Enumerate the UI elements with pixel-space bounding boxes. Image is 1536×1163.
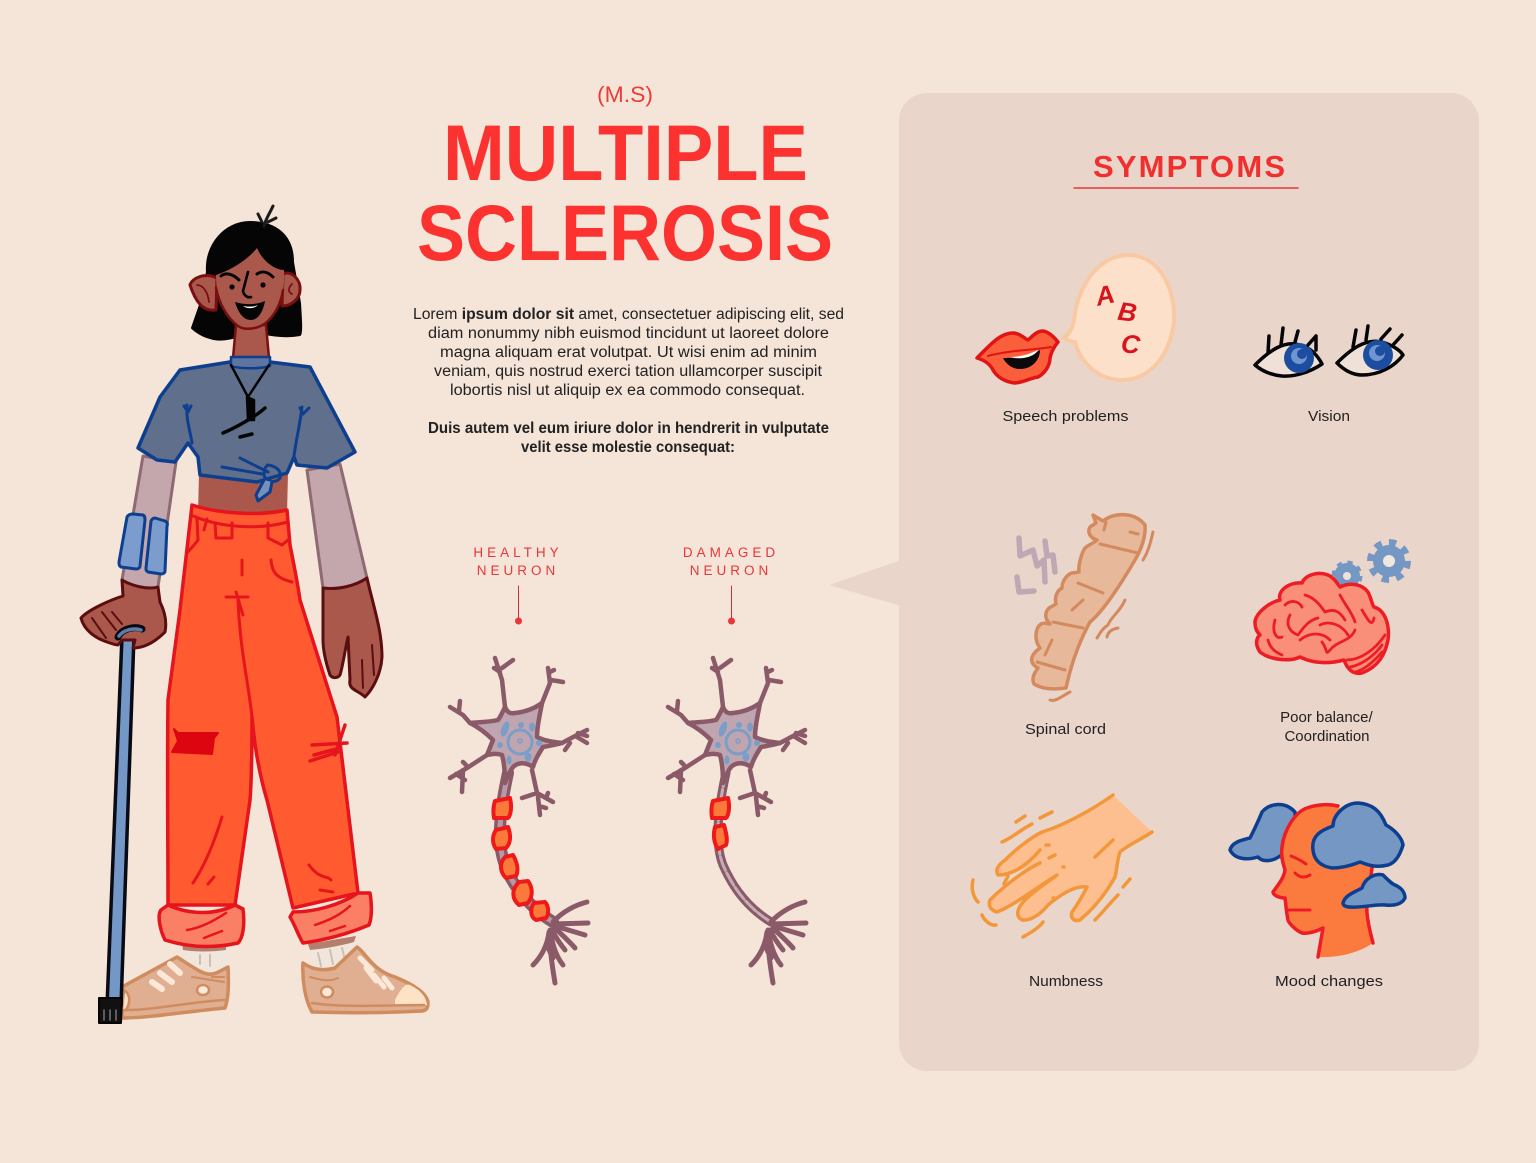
title [417,108,833,277]
cane [99,636,134,1023]
motion marks [1050,532,1153,700]
mouth [1003,350,1040,369]
icon: speech problems [977,255,1174,383]
nucleus and organelles [715,720,760,764]
title: MULTIPLE [443,108,808,197]
bold paragraph: Duis autem vel eum iriure dolor in hendrerit in vulputate [428,420,829,437]
panel pointer [829,560,901,606]
intro paragraph: Lorem ipsum dolor sit amet, consectetuer adipiscing elit, sed [413,306,844,323]
waist [198,472,288,515]
socks [177,936,358,975]
icon: mood changes head [1230,803,1405,957]
hand outline [989,795,1152,921]
label: healthy neuron: HEALTHY [473,545,563,560]
icon: spinal cord [1017,515,1153,700]
label: speech problems: Speech problems [1002,408,1128,425]
bold paragraph [428,420,829,456]
inner lip line [988,347,1051,356]
shirt knot and creases [184,405,309,501]
speech bubble [1063,255,1174,380]
ear details [197,284,292,302]
intro paragraph: lobortis nisl ut aliquip ex ea commodo consequat. [450,382,805,399]
right hand [323,578,382,697]
person with cane [81,206,428,1023]
symptoms heading: SYMPTOMS [1093,149,1285,184]
label: poor balance: Coordination [1284,728,1370,745]
label: mood changes: Mood changes [1275,973,1383,990]
icon: brain with gears [1255,543,1407,673]
axon terminal [533,902,588,983]
right shoe [303,947,428,1013]
lips [977,331,1058,383]
ears [190,276,217,310]
numbness marks [972,812,1130,937]
jaw line [216,288,283,329]
label: vision: Vision [1308,408,1350,425]
face lines [1288,856,1310,910]
right knee tear [310,725,347,761]
intro paragraph: diam nonummy nibh euismod tincidunt ut laoreet dolore [428,325,829,342]
right eye [1337,341,1403,375]
right cuff [290,893,371,943]
nucleus and organelles [497,720,542,764]
icon: numbness hand [972,795,1152,937]
left arm sleeve [122,456,176,588]
label: poor balance: Poor balance/ [1280,709,1374,726]
small cloud [1343,875,1405,907]
shirt [138,362,355,482]
small gear [1334,563,1360,589]
head outline [1273,805,1373,957]
intro paragraph: magna aliquam erat volutpat. Ut wisi enim ad minim [440,344,817,361]
brain folds [1268,595,1385,672]
subtitle: (M.S) [597,82,653,107]
label: spinal cord: Spinal cord [1025,721,1106,738]
label: damaged neuron: DAMAGED [683,545,779,560]
left cloud [1230,804,1297,861]
myelin sheaths [493,798,548,920]
axon [500,773,553,922]
letters: B [1116,296,1139,328]
left shoe [122,957,228,1018]
letters [1092,279,1143,360]
dendrites [450,658,587,815]
thin axon [718,773,771,922]
big cloud [1313,803,1403,868]
soma [470,703,562,783]
face [216,248,284,329]
intro paragraph: veniam, quis nostrud exerci tation ullamcorper suscipit [434,363,823,380]
facial features [221,272,273,320]
left eye [1255,344,1322,376]
icon: vision eyes [1255,326,1403,376]
intro paragraph [413,306,844,399]
healthy neuron [450,658,588,983]
back hair [192,222,301,340]
collar [231,357,270,368]
spine body [1032,515,1145,689]
pants details [188,515,333,892]
big gear [1371,543,1407,579]
left cuff [159,905,244,946]
damaged neuron [668,658,806,983]
bracelets [119,514,167,574]
necklace [223,365,269,437]
letters: C [1120,328,1143,360]
letters: A [1092,279,1117,312]
axon terminal [751,902,806,983]
label: healthy neuron: NEURON [477,563,559,578]
nerve lightning [1017,538,1055,592]
label: damaged neuron [683,545,779,624]
label: damaged neuron: NEURON [690,563,772,578]
label: healthy neuron [473,545,563,624]
neck [233,325,269,358]
title: SCLEROSIS [417,188,833,277]
head [1273,805,1373,957]
remaining myelin [711,798,729,849]
right arm sleeve [307,464,367,589]
pants [168,505,358,908]
vertebra lines [1037,522,1138,670]
left knee tear [172,729,218,754]
bold paragraph: velit esse molestie consequat: [521,439,735,456]
dendrites [668,658,805,815]
cuff creases [187,906,350,938]
brain outline [1255,573,1388,673]
left hand [81,580,166,648]
panel: symptoms [829,93,1479,1071]
panel background [899,93,1479,1071]
label: numbness: Numbness [1029,973,1103,990]
hair tuft [258,206,276,226]
hand [989,795,1152,921]
soma [688,703,780,783]
